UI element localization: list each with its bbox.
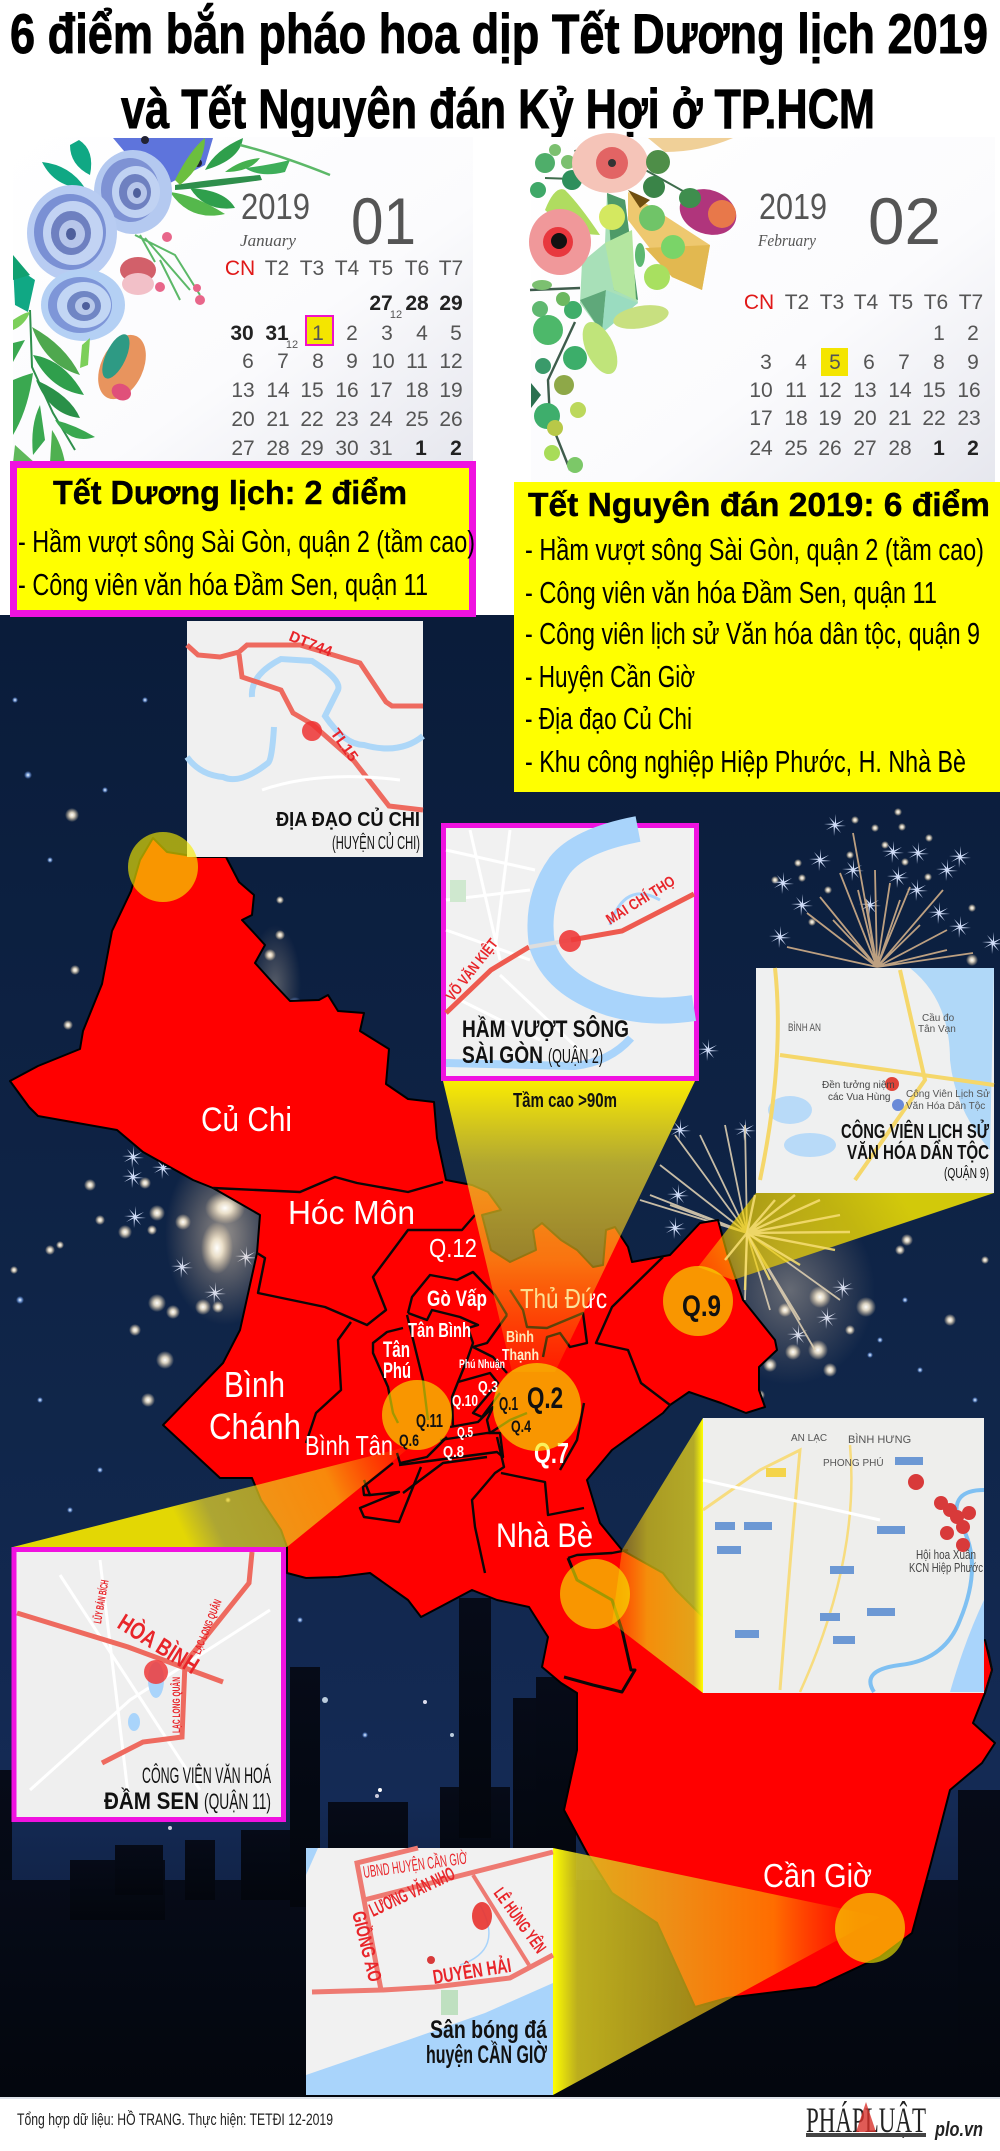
district labels on circles: Q.1 xyxy=(499,1394,518,1414)
calendar header row and date grid: 29 xyxy=(439,292,463,315)
map inset: Công viên lịch sử Văn hóa dân tộc: Văn Hóa Dân Tộc xyxy=(906,1101,985,1112)
firework glows xyxy=(118,925,913,1385)
calendar header row and date grid: 2 xyxy=(967,437,979,460)
map inset: Công viên văn hóa Đầm Sen: (QUẬN 11) xyxy=(204,1789,271,1814)
calendar header row and date grid: 21 xyxy=(888,407,912,430)
district labels on circles: Q.11 xyxy=(416,1411,443,1431)
rose bottom xyxy=(41,269,125,341)
calendar header row and date grid: 28 xyxy=(266,437,290,460)
calendar header row and date grid: 10 xyxy=(371,350,395,373)
calendar header row and date grid: 31 xyxy=(265,322,289,345)
calendar header row and date grid: 9 xyxy=(967,351,979,374)
map inset: Cần Giờ: LƯƠNG VĂN NHO xyxy=(366,1863,458,1922)
panel: Tết Nguyên đán: Tết Nguyên đán 2019: 6 điểm xyxy=(528,486,990,523)
district names: Q.5 xyxy=(457,1424,473,1441)
district names: Thạnh xyxy=(502,1347,539,1364)
calendar header row and date grid: 22 xyxy=(922,407,946,430)
calendar header row and date grid: 1 xyxy=(312,322,324,345)
district names: Chánh xyxy=(209,1406,301,1447)
panel: calendar January 2019 xyxy=(13,136,473,463)
map inset: Cần Giờ: LÊ HÙNG YÊN xyxy=(490,1884,550,1957)
calendar header row and date grid: T5 xyxy=(369,257,393,280)
calendar header row and date grid: CN xyxy=(744,291,774,314)
district names: Củ Chi xyxy=(201,1101,292,1139)
calendar header row and date grid: 5 xyxy=(450,322,462,345)
calendar header row and date grid: 26 xyxy=(818,437,842,460)
district names: Q.12 xyxy=(429,1233,477,1263)
district names: Hóc Môn xyxy=(288,1194,415,1231)
calendar header row and date grid: 7 xyxy=(898,351,910,374)
panel: Tết Dương lịch: - Công viên văn hóa Đầm Sen, quận 11 xyxy=(18,567,428,602)
map inset: Khu công nghiệp Hiệp Phước xyxy=(703,1418,984,1693)
calendar header row and date grid: 16 xyxy=(957,379,981,402)
map inset: Cần Giờ: GIỒNG AO xyxy=(347,1909,386,1984)
calendar header row and date grid xyxy=(744,291,983,460)
map inset: Công viên văn hóa Đầm Sen: LẠC LONG QUÂN xyxy=(191,1597,225,1656)
district names: Bình Tân xyxy=(305,1430,393,1461)
calendar header row and date grid: 27 xyxy=(231,437,255,460)
panel: Tết Dương lịch: Tết Dương lịch: 2 điểm xyxy=(53,474,407,511)
map inset: Hầm vượt sông Sài Gòn: SÀI GÒN xyxy=(462,1041,543,1069)
calendar header row and date grid: CN xyxy=(225,257,255,280)
calendar header row and date grid: T2 xyxy=(785,291,809,314)
calendar heading: February xyxy=(757,231,816,250)
map inset: Công viên lịch sử Văn hóa dân tộc: Đền tưởng niệm xyxy=(822,1079,895,1091)
map inset: Công viên văn hóa Đầm Sen: HÒA BÌNH xyxy=(113,1608,204,1680)
map inset: Công viên lịch sử Văn hóa dân tộc: Tân Vạn xyxy=(918,1024,956,1035)
highlighted date 1 xyxy=(306,316,333,345)
calendar header row and date grid: 28 xyxy=(888,437,912,460)
calendar header row and date grid: 26 xyxy=(439,408,463,431)
calendar header row and date grid: T4 xyxy=(335,257,360,280)
map inset: Khu công nghiệp Hiệp Phước: AN LẠC xyxy=(791,1433,827,1444)
calendar header row and date grid: 20 xyxy=(231,408,255,431)
calendar header row and date grid: 9 xyxy=(346,350,358,373)
calendar header row and date grid: 14 xyxy=(266,379,290,402)
district names xyxy=(201,1101,872,1894)
credit line: Tổng hợp dữ liệu: HỒ TRANG. Thực hiện: TETĐI 12-2019 xyxy=(17,2110,333,2129)
icon: watercolor flowers and crystal xyxy=(529,133,743,473)
hanging leaves xyxy=(30,310,75,450)
map inset: Công viên lịch sử Văn hóa dân tộc: Cầu đo xyxy=(922,1012,955,1024)
logo: PHÁPLUẬT xyxy=(806,2100,926,2140)
map inset: Khu công nghiệp Hiệp Phước: PHONG PHÚ xyxy=(823,1456,884,1469)
map inset: Cần Giờ: UBND HUYỆN CẦN GIỜ xyxy=(362,1849,469,1882)
calendar header row and date grid: 20 xyxy=(853,407,877,430)
calendar header row and date grid: 27 xyxy=(369,292,393,315)
panel: Tết Nguyên đán xyxy=(514,482,1000,792)
calendar header row and date grid: T2 xyxy=(265,257,289,280)
calendar heading: 01 xyxy=(351,184,416,258)
calendar header row and date grid: T6 xyxy=(405,257,429,280)
district names: Bình xyxy=(506,1329,534,1346)
calendar header row and date grid: T7 xyxy=(439,257,463,280)
map inset: Công viên lịch sử Văn hóa dân tộc: Công Viên Lịch Sử xyxy=(906,1088,990,1100)
calendar header row and date grid: 12 xyxy=(818,379,842,402)
district names: Q.7 xyxy=(534,1438,569,1470)
firework rays upper right xyxy=(787,833,973,967)
district names: Cần Giờ xyxy=(763,1857,872,1894)
calendar header row and date grid: T3 xyxy=(820,291,844,314)
map inset: Công viên văn hóa Đầm Sen: ĐẦM SEN xyxy=(104,1787,199,1815)
calendar header row and date grid: T7 xyxy=(959,291,983,314)
district names: Q.8 xyxy=(443,1444,464,1461)
map inset: Địa đạo Củ Chi: (HUYỆN CỦ CHI) xyxy=(332,832,420,853)
calendar header row and date grid: 15 xyxy=(300,379,324,402)
envelope xyxy=(628,192,710,290)
calendar heading: 02 xyxy=(868,184,941,258)
calendar header row and date grid: 12 xyxy=(439,350,463,373)
map inset: Công viên lịch sử Văn hóa dân tộc: các Vua Hùng xyxy=(828,1092,890,1103)
calendar header row and date grid: 17 xyxy=(749,407,773,430)
map inset: Hầm vượt sông Sài Gòn: HẦM VƯỢT SÔNG xyxy=(462,1015,629,1043)
calendar header row and date grid: 24 xyxy=(749,437,773,460)
calendar header row and date grid: 13 xyxy=(853,379,877,402)
night sky background xyxy=(0,615,1000,2110)
cone: Hầm vượt sông Sài Gòn xyxy=(443,1081,695,1372)
map inset: Cần Giờ: huyện CẦN GIỜ xyxy=(426,2039,547,2069)
calendar header row and date grid: 2 xyxy=(346,322,358,345)
district boundaries xyxy=(213,1177,992,1693)
skyline silhouette xyxy=(0,1598,1000,2110)
calendar header row and date grid: 12 xyxy=(286,339,298,351)
map inset: Công viên lịch sử Văn hóa dân tộc xyxy=(756,968,994,1193)
map inset: Cần Giờ: Sân bóng đá xyxy=(430,2016,547,2044)
title xyxy=(10,2,988,140)
map inset: Hầm vượt sông Sài Gòn xyxy=(442,826,696,1078)
district names: Phú xyxy=(383,1358,411,1383)
map inset: Địa đạo Củ Chi: ĐỊA ĐẠO CỦ CHI xyxy=(276,807,420,831)
district labels on circles: Q.6 xyxy=(399,1431,419,1450)
district names: Nhà Bè xyxy=(496,1517,593,1555)
calendar header row and date grid: 25 xyxy=(784,437,808,460)
calendar heading xyxy=(240,184,416,258)
calendar header row and date grid: 10 xyxy=(749,379,773,402)
calendar header row and date grid: T6 xyxy=(924,291,948,314)
panel: Tết Dương lịch xyxy=(14,464,475,614)
calendar header row and date grid: 6 xyxy=(242,350,254,373)
calendar heading: January xyxy=(240,231,296,250)
calendar header row and date grid: 23 xyxy=(335,408,359,431)
map inset: Công viên lịch sử Văn hóa dân tộc: BÌNH AN xyxy=(788,1021,821,1034)
panel: Tết Dương lịch: - Hầm vượt sông Sài Gòn, quận 2 (tầm cao) xyxy=(18,524,475,559)
calendar header row and date grid: 1 xyxy=(933,437,945,460)
map inset: Hầm vượt sông Sài Gòn: (QUẬN 2) xyxy=(548,1045,603,1068)
calendar header row and date grid: 13 xyxy=(231,379,255,402)
stars xyxy=(10,697,1000,1830)
district labels on circles: Q.4 xyxy=(511,1417,531,1436)
calendar header row and date grid xyxy=(225,257,463,460)
map inset: Khu công nghiệp Hiệp Phước: Hội hoa Xuân xyxy=(916,1547,976,1562)
bud xyxy=(673,181,743,243)
calendar header row and date grid: 5 xyxy=(829,351,841,374)
map inset: Cần Giờ: DUYÊN HẢI xyxy=(431,1953,513,1989)
calendar header row and date grid: 18 xyxy=(405,379,429,402)
crystal xyxy=(580,193,638,333)
red city outline xyxy=(10,838,995,2007)
calendar header row and date grid: 24 xyxy=(369,408,393,431)
calendar header row and date grid: 4 xyxy=(795,351,807,374)
red poppy xyxy=(529,209,591,275)
cone: Cần Giờ xyxy=(553,1848,880,2095)
calendar header row and date grid: 19 xyxy=(818,407,842,430)
logo: plo.vn xyxy=(934,2119,983,2141)
calendar header row and date grid: T4 xyxy=(854,291,879,314)
district names: Phú Nhuận xyxy=(459,1357,505,1371)
map inset: Công viên văn hóa Đầm Sen xyxy=(14,1550,284,1820)
calendar header row and date grid: 7 xyxy=(277,350,289,373)
calendar header row and date grid: 11 xyxy=(785,379,807,402)
calendar header row and date grid: 30 xyxy=(335,437,359,460)
district names: Tân Bình xyxy=(408,1320,471,1342)
calendar heading xyxy=(757,184,941,258)
calendar header row and date grid: 31 xyxy=(369,437,393,460)
calendar header row and date grid: 21 xyxy=(266,408,290,431)
district labels on circles: Q.2 xyxy=(527,1382,563,1415)
calendar header row and date grid: 25 xyxy=(405,408,429,431)
pink flower xyxy=(572,133,648,193)
map inset: Địa đạo Củ Chi: TL15 xyxy=(327,726,361,765)
district labels on circles xyxy=(399,1290,721,1450)
district names: Gò Vấp xyxy=(427,1286,487,1311)
calendar header row and date grid: 8 xyxy=(312,350,324,373)
panel: calendar February 2019 xyxy=(529,133,995,482)
calendar header row and date grid: 4 xyxy=(416,322,428,345)
firework rays near Quận 9 xyxy=(640,1125,840,1350)
rose left xyxy=(27,185,117,281)
calendar header row and date grid: 28 xyxy=(405,292,429,315)
district names: Q.3 xyxy=(478,1379,498,1396)
calendar header row and date grid: 19 xyxy=(439,379,463,402)
district names: Tân xyxy=(383,1337,410,1362)
district names: Thủ Đức xyxy=(520,1283,607,1314)
calendar heading: 2019 xyxy=(241,186,310,227)
calendar header row and date grid: 15 xyxy=(922,379,946,402)
map inset: Địa đạo Củ Chi: DT744 xyxy=(287,628,335,661)
icon: blue rose bouquet xyxy=(13,136,330,463)
map inset: Công viên văn hóa Đầm Sen: CÔNG VIÊN VĂN HOÁ xyxy=(142,1763,271,1788)
calendar header row and date grid: 3 xyxy=(760,351,772,374)
map inset: Hầm vượt sông Sài Gòn: MAI CHÍ THỌ xyxy=(603,872,679,928)
height note: Tầm cao >90m xyxy=(513,1090,617,1112)
district labels on circles: Q.9 xyxy=(682,1290,721,1323)
district names: Bình xyxy=(224,1364,285,1405)
calendar header row and date grid: 18 xyxy=(784,407,808,430)
calendar header row and date grid: T3 xyxy=(300,257,324,280)
cone: Đầm Sen xyxy=(13,1443,415,1547)
calendar header row and date grid: 1 xyxy=(415,437,427,460)
calendar header row and date grid: 2 xyxy=(967,322,979,345)
location circles xyxy=(128,832,905,1963)
cone: Quận 9 xyxy=(698,1193,994,1280)
map inset: Cần Giờ xyxy=(306,1848,553,2095)
cone: Khu công nghiệp Hiệp Phước xyxy=(612,1418,703,1693)
footer xyxy=(0,2097,1000,2151)
calendar header row and date grid: 12 xyxy=(390,309,402,321)
map inset: Hầm vượt sông Sài Gòn: VÕ VĂN KIỆT xyxy=(442,935,502,1004)
calendar header row and date grid: 17 xyxy=(369,379,393,402)
map inset: Khu công nghiệp Hiệp Phước: BÌNH HƯNG xyxy=(848,1433,911,1446)
map inset: Công viên văn hóa Đầm Sen: LẠC LONG QUÂN xyxy=(170,1677,183,1733)
calendar header row and date grid: T5 xyxy=(889,291,913,314)
calendar header row and date grid: 22 xyxy=(300,408,324,431)
calendar header row and date grid: 16 xyxy=(335,379,359,402)
rose top xyxy=(94,150,172,234)
calendar header row and date grid: 11 xyxy=(406,350,428,373)
map inset: Công viên văn hóa Đầm Sen: LŨY BÁN BÍCH xyxy=(91,1579,112,1625)
calendar header row and date grid: 23 xyxy=(957,407,981,430)
map of Ho Chi Minh City districts xyxy=(10,838,995,2007)
calendar header row and date grid: 2 xyxy=(450,437,462,460)
calendar header row and date grid: 3 xyxy=(381,322,393,345)
calendar header row and date grid: 27 xyxy=(853,437,877,460)
calendar header row and date grid: 1 xyxy=(933,322,945,345)
calendar header row and date grid: 6 xyxy=(863,351,875,374)
gold firework rays over Quận 9 cone xyxy=(725,1195,850,1290)
calendar header row and date grid: 30 xyxy=(230,322,254,345)
calendar header row and date grid: 8 xyxy=(933,351,945,374)
highlighted date 5 xyxy=(821,348,848,376)
calendar heading: 2019 xyxy=(759,186,827,227)
calendar header row and date grid: 14 xyxy=(888,379,912,402)
panel: Tết Nguyên đán: - Huyện Cần Giờ xyxy=(525,659,695,694)
calendar header row and date grid: 29 xyxy=(300,437,324,460)
district names: Q.10 xyxy=(452,1393,478,1410)
painted leaf xyxy=(89,327,155,407)
map inset: Địa đạo Củ Chi xyxy=(187,621,423,857)
panel: Tết Nguyên đán: - Địa đạo Củ Chi xyxy=(525,701,692,736)
